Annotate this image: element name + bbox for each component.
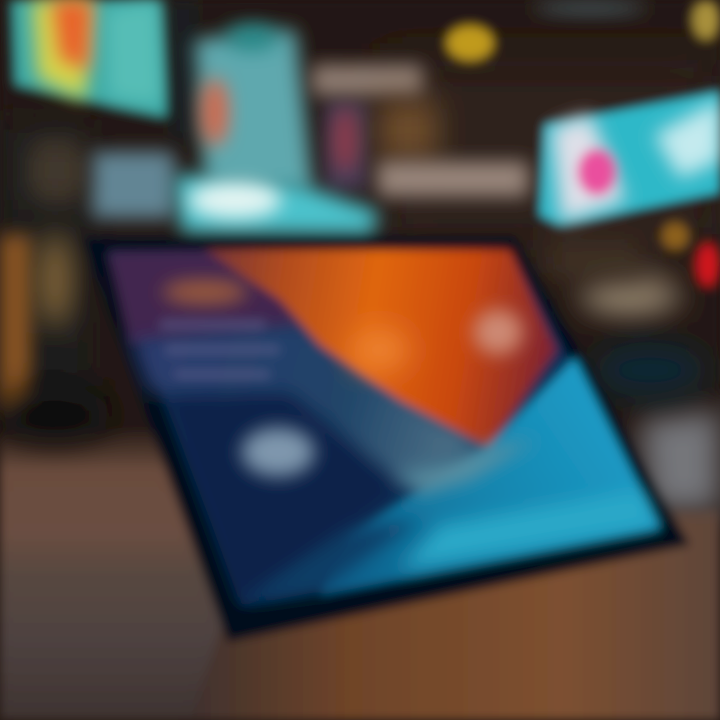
screen: text glow, paragraph <box>160 320 280 379</box>
bright cyan glare strip <box>175 175 378 234</box>
left shelf: amber glow <box>0 152 110 443</box>
screen: soft orange highlight <box>352 330 408 370</box>
screen: orange wave <box>205 250 556 447</box>
screen: text glow, heading <box>163 280 247 304</box>
screen: white cloud glyph <box>242 428 314 476</box>
tablet <box>82 236 690 642</box>
screen: bright lower streak <box>400 490 655 570</box>
screen: cyan wave <box>320 358 660 595</box>
screen: dark lower band <box>245 520 420 600</box>
yellow ceiling lights <box>446 0 720 250</box>
tablet body <box>82 236 690 642</box>
right background objects <box>545 240 720 398</box>
background: wood table <box>0 410 720 720</box>
top-left colourful screen <box>12 0 194 140</box>
screen: mid blue left band <box>130 325 480 482</box>
screen: navy lower wedge <box>165 385 410 604</box>
screen: grey crest <box>395 440 535 495</box>
right wall screen <box>540 92 720 225</box>
centre display panels <box>30 24 528 218</box>
screen: right highlight <box>474 310 522 354</box>
screen: purple upper left <box>108 250 300 345</box>
screen: deep blue base <box>108 250 660 606</box>
